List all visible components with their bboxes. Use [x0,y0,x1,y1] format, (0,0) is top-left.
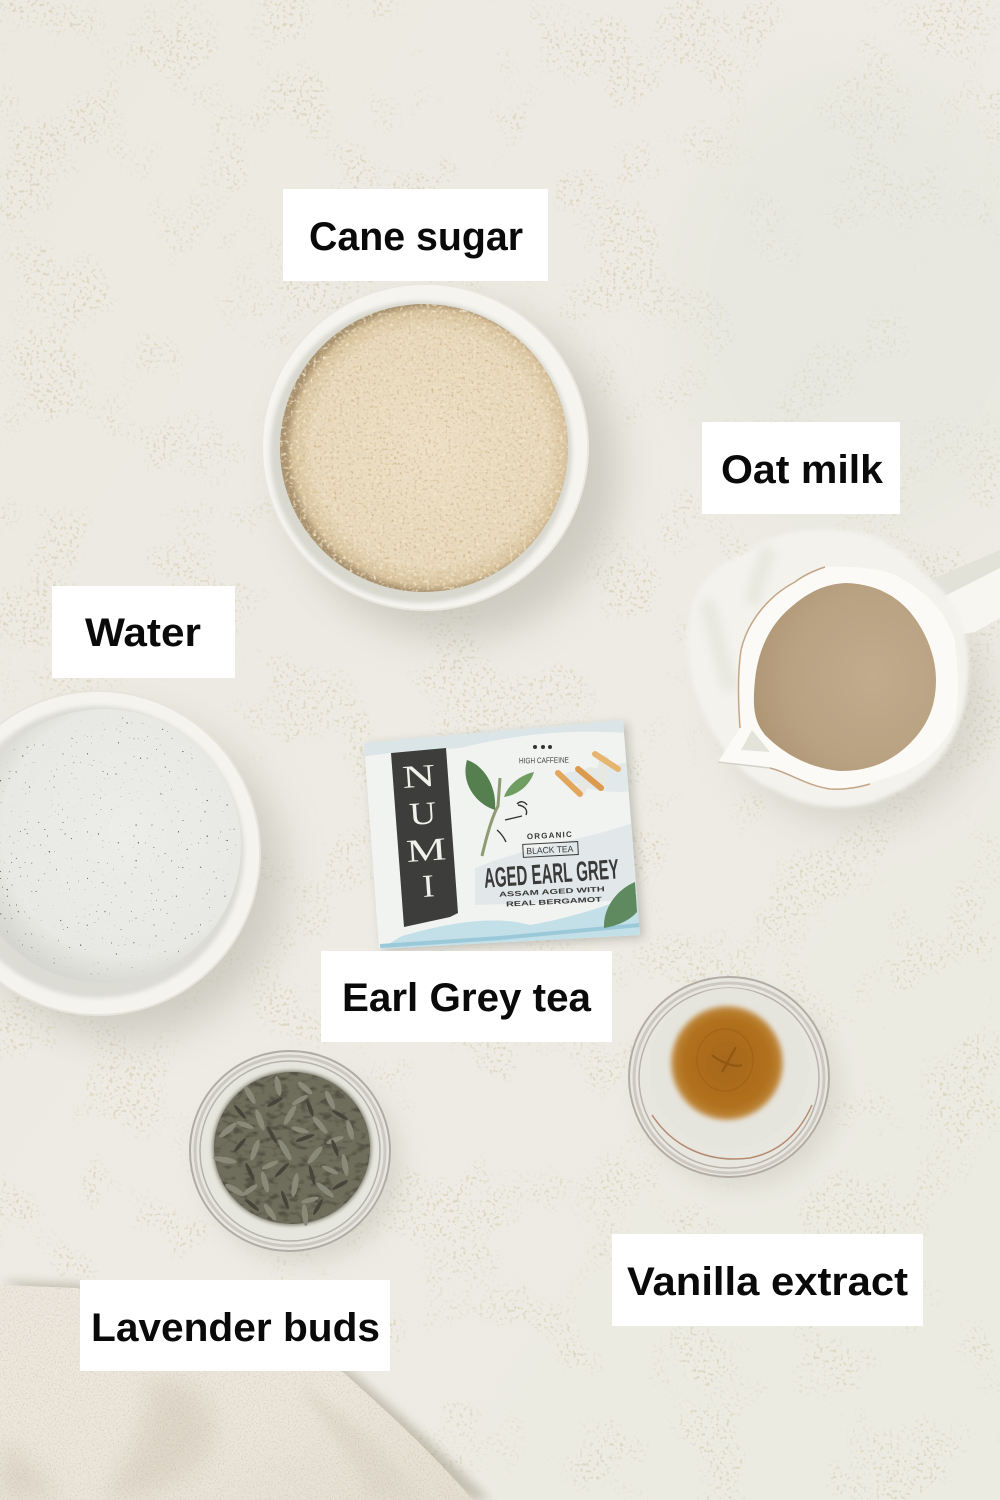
label: Oat milk [702,422,900,514]
glass dish of lavender buds [189,1050,402,1263]
Numi logo: N [401,757,436,795]
packet title text: AGED EARL GREY [483,853,620,894]
label: Cane sugar [283,189,548,281]
pitcher of oat milk [687,530,1000,825]
vanilla liquid [670,1005,784,1121]
packet title text: BLACK TEA [526,844,574,856]
Numi logo [401,757,447,904]
small leaf [604,882,637,928]
packet title text: ORGANIC [527,830,573,841]
label: Oat milk: Oat milk [721,448,884,492]
label: Water: Water [85,611,201,655]
label: Lavender buds: Lavender buds [91,1306,380,1350]
milk [754,583,936,771]
label: Earl Grey tea: Earl Grey tea [342,976,592,1020]
orange peel [558,754,618,794]
caffeine dots and label: HIGH CAFFEINE [519,756,569,765]
label: Earl Grey tea [321,951,612,1042]
lavender buds [213,1071,371,1226]
label: Water [52,586,235,678]
label: Cane sugar: Cane sugar [309,215,523,259]
tea packet: Numi Aged Earl Grey [360,717,645,952]
label: Vanilla extract [612,1234,923,1326]
caffeine dots and label [519,745,569,765]
label: Vanilla extract: Vanilla extract [627,1260,908,1304]
water surface [0,709,241,983]
sugar [280,304,568,592]
black Numi strip [391,748,458,927]
packet title text [483,830,620,909]
packet title text: REAL BERGAMOT [506,896,603,909]
glass dish of vanilla extract [628,976,840,1188]
handle [930,550,1000,636]
Numi logo: M [405,830,447,869]
bowl of water [0,691,285,1038]
label: Lavender buds [80,1280,390,1371]
packet title text: ASSAM AGED WITH [499,886,605,899]
Numi logo: I [421,867,435,904]
rim and spout [718,567,958,789]
linen cloth corner [0,1280,490,1500]
tea sprig [465,760,534,856]
Numi logo: U [408,794,437,832]
bowl of cane sugar [262,284,618,638]
